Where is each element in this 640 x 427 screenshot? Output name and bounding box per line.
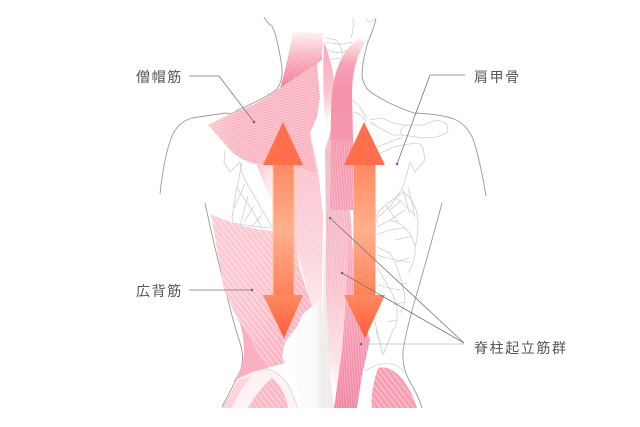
latissimus lower insertion [233,320,267,382]
muscle: latissimus dorsi [211,214,312,382]
body outline [160,17,486,408]
right arrow head down [344,295,385,338]
label: scapula: 肩甲骨 [474,69,521,85]
trapezius fade [256,163,272,200]
panel: gluteal right [365,364,417,408]
left arrow shaft edge [272,165,294,295]
left arrow head down [263,295,303,338]
callout: scapula leader [396,75,465,165]
muscle: upper trapezius [280,32,323,89]
left arrow shaft [274,165,294,230]
central muscle strip [323,42,335,408]
right arrow shaft [354,165,375,230]
label: erector spinae: 脊柱起立筋群 [474,340,568,356]
arrow: left double arrow [263,122,303,338]
callout: trapezius leader [189,76,255,123]
scapula and clavicle [370,118,448,217]
right arrow head up [344,122,385,165]
muscle: trapezius [208,63,320,208]
panel: gluteal left [222,368,298,408]
neck and upper back bones [326,18,374,122]
right arrow shaft edge [353,165,376,295]
gluteal inner [248,378,288,408]
left ribcage [224,150,272,228]
muscle: erector spinae lower [334,210,370,408]
right ribcage [373,192,418,355]
gluteal outer [232,370,298,408]
muscle: lower trapezius [272,134,323,307]
body illustration [160,17,486,408]
label: trapezius: 僧帽筋 [136,69,183,85]
arrow: right double arrow [344,122,385,338]
muscle: erector spinae pale [326,210,350,395]
muscle: erector spinae upper [330,38,365,210]
label: latissimus dorsi: 広背筋 [136,283,183,299]
left arrow head up [263,122,303,165]
callout: latissimus leader [189,289,253,291]
spine column [316,296,324,408]
callout: erector spinae leaders [329,217,464,345]
